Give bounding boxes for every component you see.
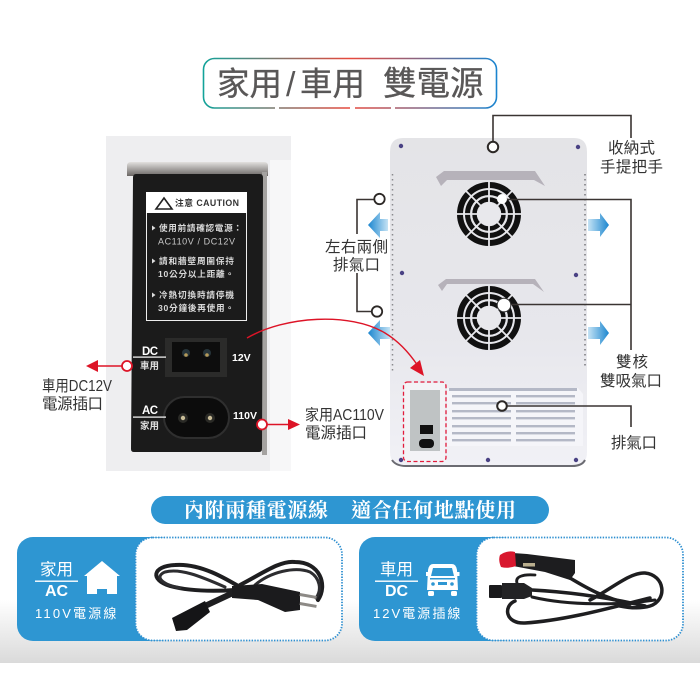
callout: AC110V socket: 家用AC110V — [305, 406, 385, 424]
caution label: AC110V / DC12V — [158, 236, 235, 246]
callout: dual fans: 雙吸氣口 — [600, 372, 662, 390]
callout: side vents — [325, 194, 388, 317]
banner: 內附兩種電源線 — [184, 499, 328, 522]
banner — [151, 496, 549, 524]
background gradient band — [0, 600, 700, 663]
callout: dual fans — [497, 194, 662, 390]
DC socket: 12V — [232, 352, 251, 364]
screws — [399, 144, 403, 148]
panel: DC cord — [359, 537, 683, 641]
caution label — [146, 192, 247, 320]
power inset — [404, 382, 446, 462]
AC socket: 家用 — [140, 420, 159, 432]
callout: AC110V socket — [257, 406, 385, 442]
callout: DC12V socket: 車用DC12V — [42, 377, 113, 395]
callout: DC12V socket — [42, 360, 132, 413]
callout: exhaust: 排氣口 — [611, 434, 657, 452]
callout: handle: 手提把手 — [600, 158, 663, 176]
caution label: 注意 CAUTION — [175, 197, 239, 208]
callout: exhaust — [497, 401, 657, 452]
label: car DC: DC — [385, 583, 409, 600]
label: car DC: 車用 — [380, 560, 413, 579]
panel: AC cord — [17, 537, 342, 641]
AC socket: 110V — [233, 410, 257, 422]
callout: handle — [488, 116, 663, 176]
label: home AC: AC — [45, 583, 69, 600]
caution label: 冷熱切換時請停機 — [159, 289, 234, 300]
panel: power socket photo — [106, 136, 291, 471]
handle recesses — [436, 171, 545, 186]
title: / — [286, 66, 296, 104]
DC socket — [133, 338, 251, 377]
callout: side vents: 排氣口 — [333, 256, 380, 274]
callout: AC110V socket: 電源插口 — [305, 424, 367, 442]
title: 車用 — [300, 66, 365, 102]
icon: house — [84, 561, 120, 594]
AC socket — [133, 397, 257, 438]
label: home AC — [35, 560, 118, 621]
callout: handle: 收納式 — [608, 139, 655, 157]
exhaust vent — [447, 388, 583, 446]
panel: fridge back view — [390, 138, 587, 467]
AC power cord — [156, 562, 322, 631]
label: home AC: 家用 — [40, 560, 73, 579]
side perforations — [392, 174, 394, 372]
caution label: 請和牆壁周圍保持 — [159, 255, 234, 266]
callout: DC12V socket: 電源插口 — [42, 395, 103, 413]
arrows: right airflow — [588, 213, 609, 345]
caution label: 10公分以上距離。 — [158, 268, 234, 279]
AC socket: AC — [142, 405, 158, 417]
lower fan — [456, 285, 522, 351]
DC socket: DC — [142, 346, 158, 358]
DC socket: 車用 — [140, 360, 159, 372]
arrows: left airflow — [368, 212, 390, 346]
black control plate — [131, 174, 263, 452]
DC power cord — [489, 551, 662, 623]
title — [204, 58, 496, 110]
label: car DC — [373, 560, 462, 621]
recess shadow — [127, 162, 268, 176]
upper fan — [456, 181, 522, 247]
title: 雙電源 — [383, 66, 484, 103]
label: car DC: 12V電源插線 — [373, 606, 462, 621]
caution label: 使用前請確認電源： — [159, 222, 242, 233]
banner: 適合任何地點使用 — [351, 498, 516, 522]
icon: bus — [426, 564, 460, 596]
callout: side vents: 左右兩側 — [325, 238, 388, 256]
red arrow: 12V to fridge inset — [247, 319, 424, 376]
label: home AC: 110V電源線 — [35, 606, 118, 621]
callout: dual fans: 雙核 — [616, 353, 648, 371]
title: 家用 — [217, 66, 282, 102]
caution label: 30分鐘後再使用。 — [158, 302, 234, 313]
